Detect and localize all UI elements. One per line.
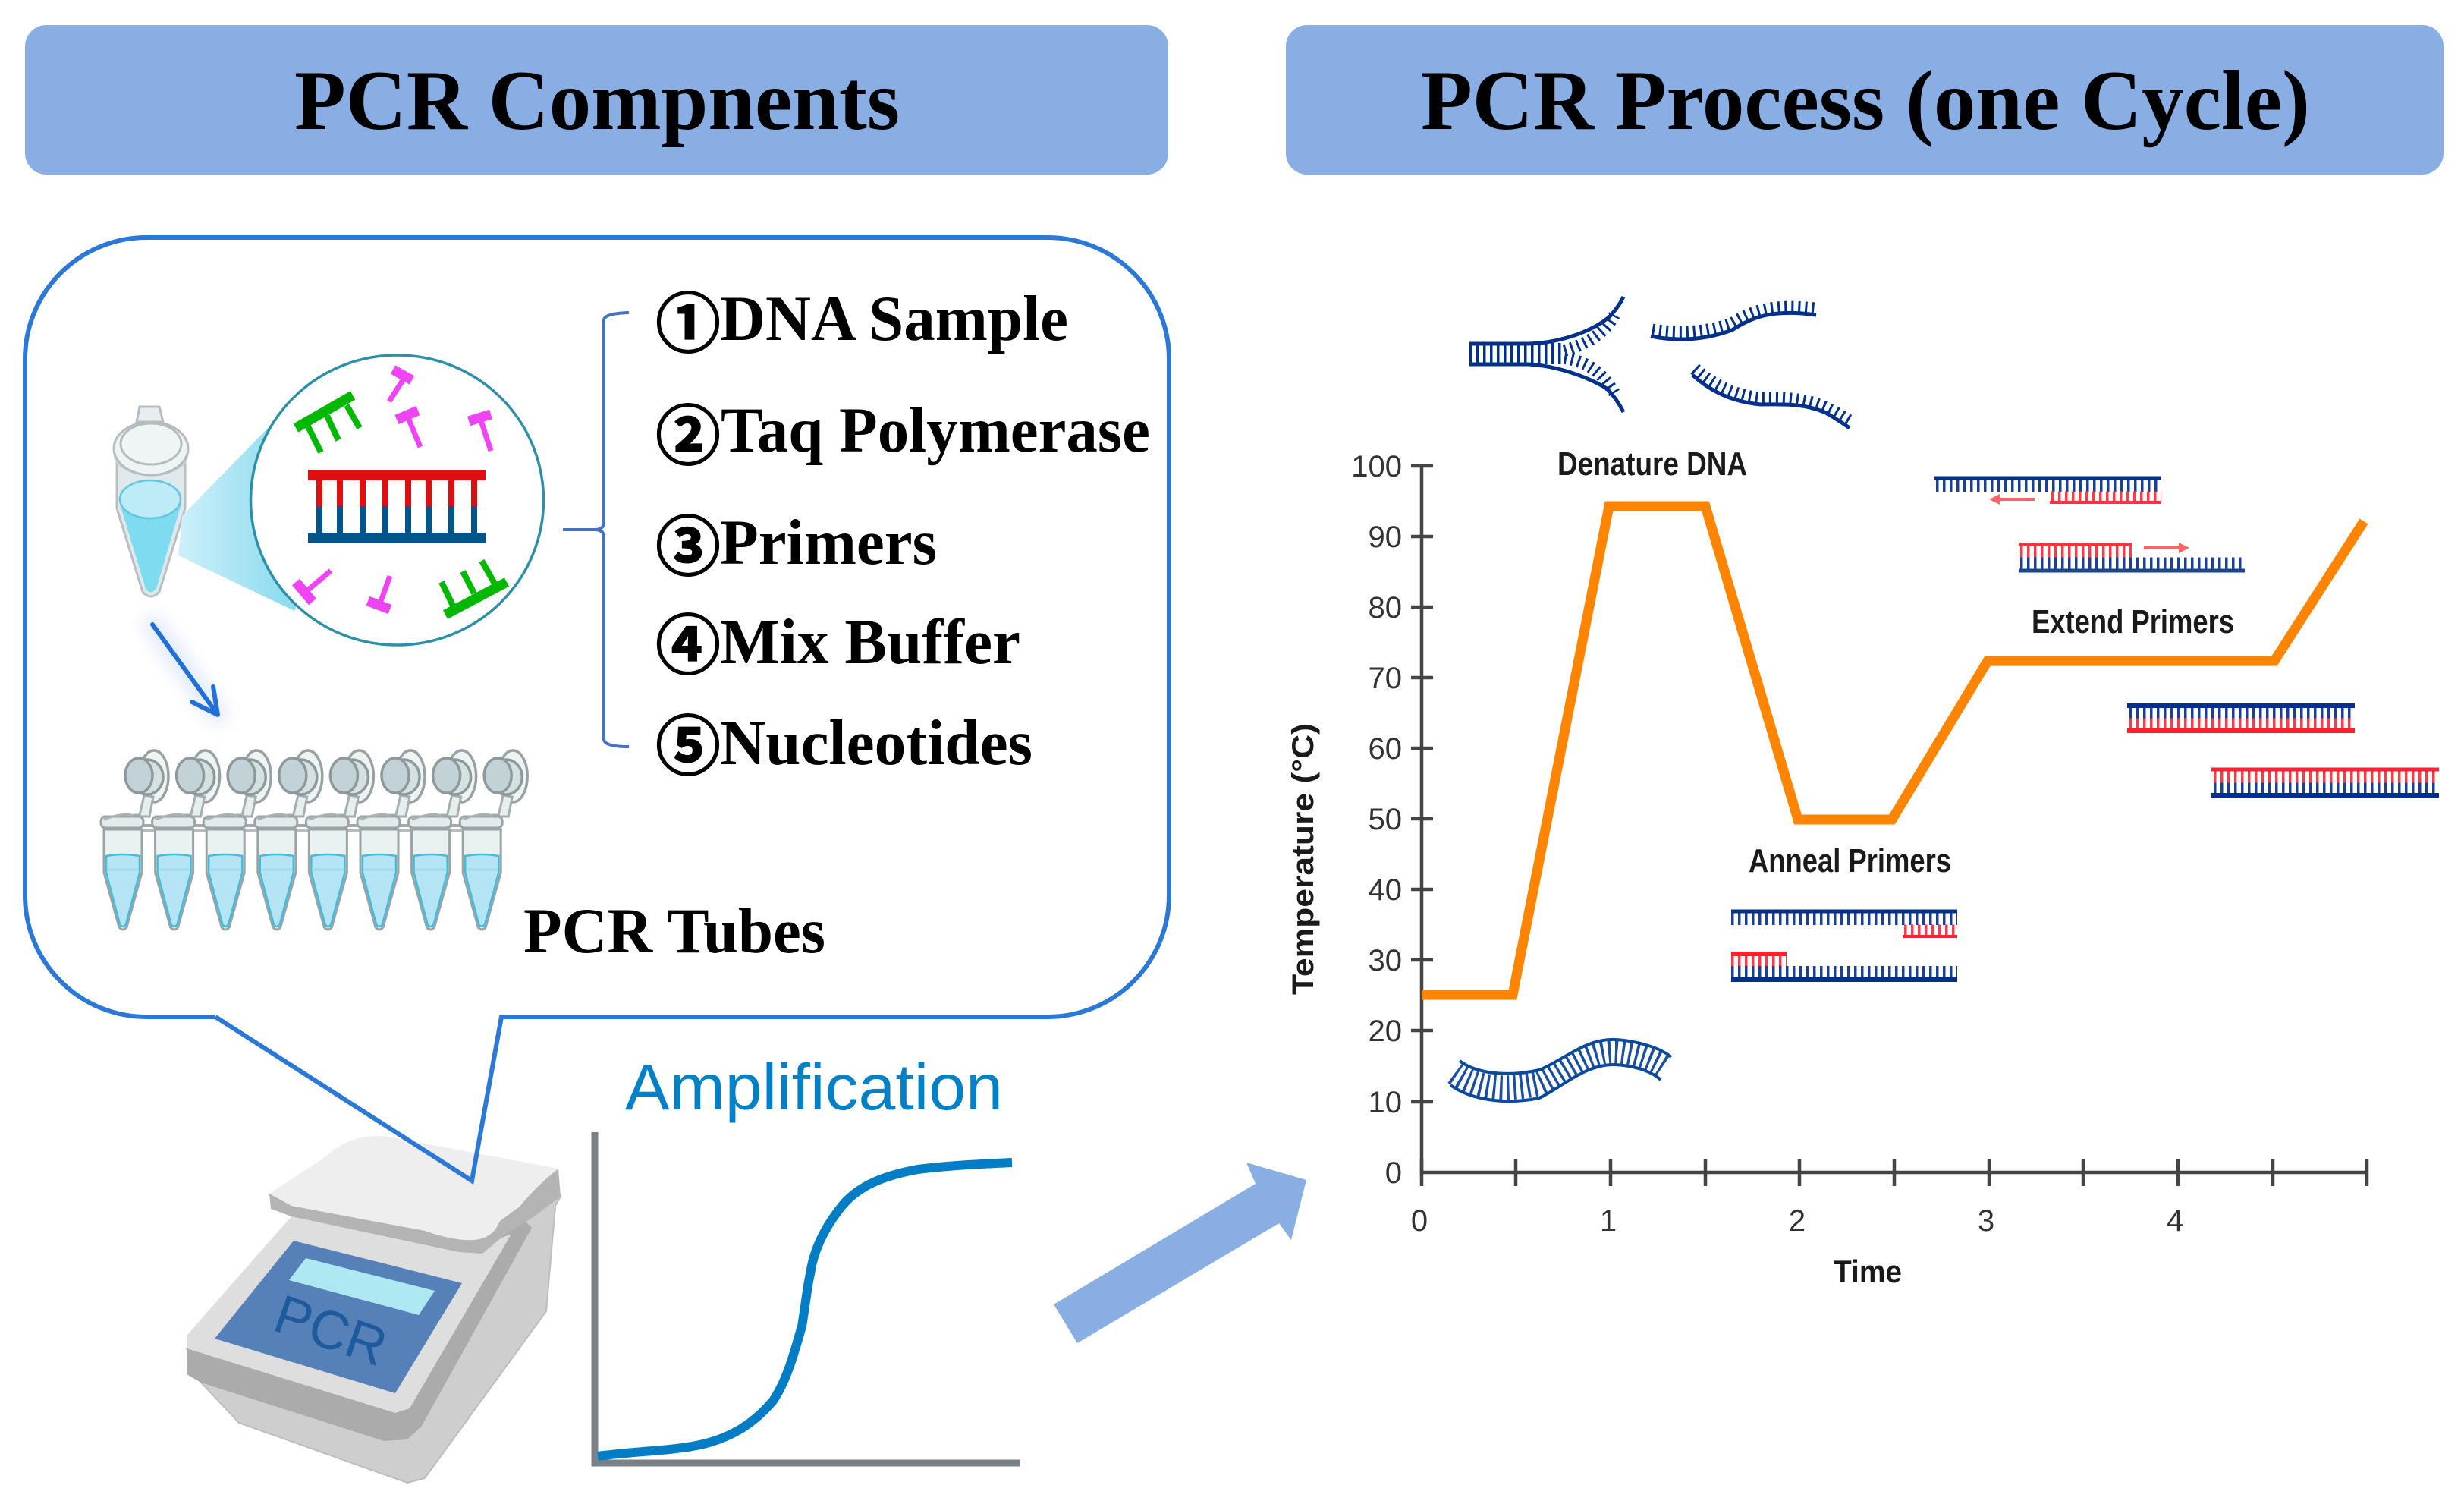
list item 5: ⑤ — [655, 695, 721, 788]
y axis numbers: 30 — [1369, 944, 1402, 977]
x axis numbers: 2 — [1789, 1204, 1806, 1238]
x axis title: Time — [1834, 1254, 1902, 1289]
y axis numbers: 70 — [1369, 662, 1402, 695]
header: PCR Compnents — [25, 25, 1168, 175]
label: PCR Tubes: PCR Tubes — [523, 895, 825, 967]
x axis numbers: 0 — [1411, 1204, 1428, 1238]
list item 1: ① — [655, 272, 721, 366]
list item 2: ② — [655, 385, 721, 478]
y axis numbers: 40 — [1369, 873, 1402, 907]
list item 2 — [655, 385, 1150, 478]
list item 3: ③ — [655, 496, 721, 589]
icon: extended duplex D — [2211, 769, 2439, 795]
list item 3 — [655, 496, 937, 589]
icon: annealing strand B — [1731, 954, 1957, 980]
panel: magnified reaction mix circle — [250, 355, 543, 645]
y axis numbers: 100 — [1351, 450, 1402, 483]
list item 5 — [655, 695, 1032, 788]
icon: annealing strand A — [1731, 911, 1957, 936]
temperature curve — [1422, 506, 2364, 995]
label: Anneal Primers: Anneal Primers — [1749, 842, 1951, 879]
x axis numbers: 3 — [1978, 1204, 1994, 1238]
arrow: large blue arrow — [1054, 1163, 1306, 1343]
icon: PCR tube strip — [101, 750, 527, 930]
icon: separated strand top — [1651, 307, 1816, 339]
icon: green polymerase bottom — [442, 561, 507, 615]
label: Amplification: Amplification — [625, 1052, 1003, 1124]
icon: denaturing DNA fork — [1469, 297, 1623, 412]
list item 3: Primers — [720, 507, 937, 578]
icon: separated strand bottom — [1692, 369, 1851, 428]
y axis numbers: 10 — [1369, 1086, 1402, 1119]
y axis numbers: 60 — [1369, 732, 1402, 766]
header: PCR Process (one Cycle): PCR Process (one Cycle) — [1421, 54, 2310, 148]
icon: PCR thermocycler machine: PCR — [267, 1283, 394, 1378]
y axis numbers: 20 — [1369, 1015, 1402, 1048]
list item 4: ④ — [655, 594, 721, 687]
icon: magenta primers — [296, 370, 491, 609]
list item 1: DNA Sample — [720, 283, 1068, 354]
list item 1 — [655, 272, 1068, 366]
y axis numbers — [1351, 450, 1402, 1190]
magnifier cone — [178, 426, 341, 611]
label: Extend Primers: Extend Primers — [2032, 603, 2234, 640]
y axis numbers: 80 — [1369, 591, 1402, 625]
y axis numbers: 90 — [1369, 521, 1402, 554]
arrow: tube to strip — [152, 625, 218, 715]
chart: PCR temperature cycle — [1287, 445, 2367, 1289]
axes — [1411, 464, 2367, 1186]
icon: green polymerase top — [296, 395, 360, 452]
icon: extending strand B — [2019, 543, 2245, 571]
y axis numbers: 50 — [1369, 803, 1402, 836]
icon: extending strand A — [1934, 478, 2161, 505]
label: Denature DNA: Denature DNA — [1557, 445, 1747, 483]
list item 4: Mix Buffer — [720, 606, 1020, 678]
bracket — [563, 313, 629, 747]
component list — [655, 272, 1150, 788]
y axis numbers: 0 — [1385, 1156, 1402, 1190]
list item 5: Nucleotides — [720, 707, 1032, 779]
icon: double-stranded DNA — [308, 470, 486, 543]
panel: callout outline with tail — [25, 238, 1169, 1181]
header: PCR Compnents: PCR Compnents — [294, 54, 900, 148]
icon: PCR thermocycler machine — [187, 1136, 561, 1483]
icon: extended duplex C — [2127, 706, 2355, 731]
y axis title: Temperature (°C) — [1287, 723, 1320, 995]
icon: single PCR tube — [114, 407, 188, 596]
list item 4 — [655, 594, 1020, 687]
x axis numbers — [1411, 1204, 2183, 1238]
icon: double helix wave — [1450, 1040, 1671, 1101]
x axis numbers: 4 — [2167, 1204, 2183, 1238]
chart: amplification curve — [595, 1132, 1020, 1463]
list item 2: Taq Polymerase — [721, 395, 1150, 466]
x axis numbers: 1 — [1600, 1204, 1617, 1238]
header: PCR Process (one Cycle) — [1286, 25, 2444, 175]
